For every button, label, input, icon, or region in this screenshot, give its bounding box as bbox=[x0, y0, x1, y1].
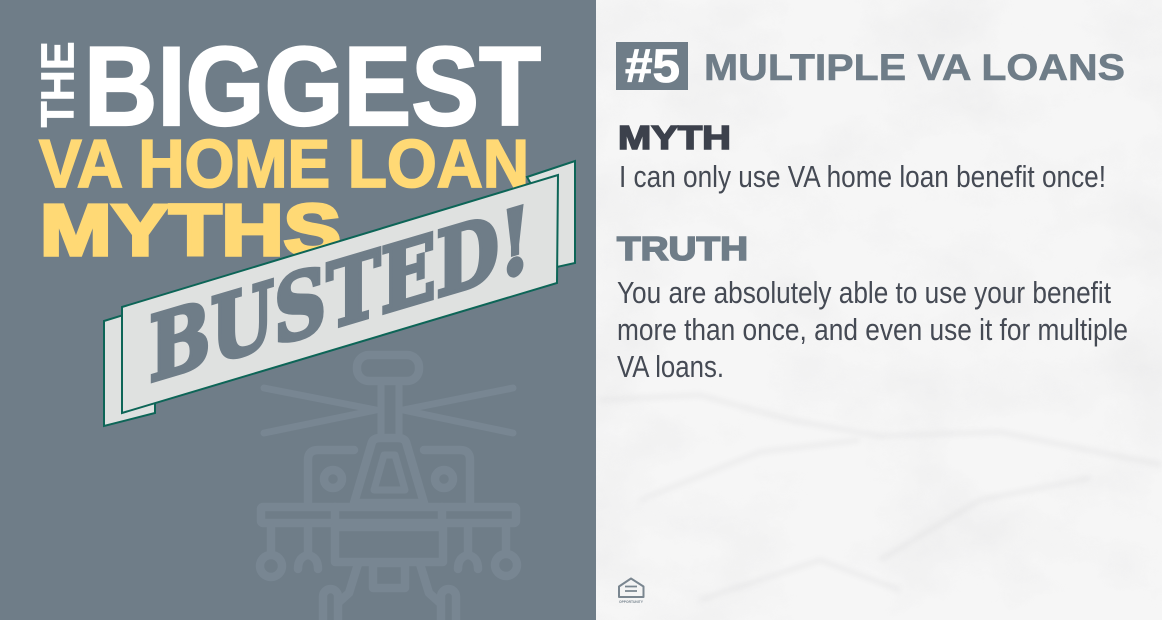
heading text: MULTIPLE VA LOANS bbox=[704, 47, 1125, 88]
panel: left slate background bbox=[0, 0, 596, 620]
truth label: TRUTH bbox=[617, 230, 748, 267]
banner front bbox=[122, 175, 558, 413]
text block: truth bbox=[617, 230, 1128, 384]
myth label: MYTH bbox=[618, 119, 731, 156]
banner back left tail bbox=[104, 313, 155, 426]
title word: THE: THE bbox=[32, 42, 84, 128]
title: The Biggest VA Home Loan Myths bbox=[32, 24, 541, 271]
banner back right tail bbox=[527, 161, 575, 267]
icon: equal housing opportunity bbox=[619, 578, 644, 604]
truth body bbox=[617, 275, 1128, 384]
heading: #5 Multiple VA Loans bbox=[616, 39, 1125, 92]
banner text: BUSTED! bbox=[149, 185, 531, 404]
icon: equal housing opportunity: OPPORTUNITY bbox=[619, 599, 643, 604]
panel: right marble background bbox=[596, 0, 1162, 620]
number badge bbox=[616, 42, 688, 90]
banner: BUSTED ribbon bbox=[104, 161, 575, 426]
text block: myth bbox=[618, 119, 1106, 194]
title word: MYTHS: MYTHS bbox=[40, 191, 341, 271]
number text: #5 bbox=[625, 39, 680, 92]
title line: VA HOME LOAN: VA HOME LOAN bbox=[39, 126, 529, 202]
icon: helicopter watermark bbox=[260, 355, 517, 620]
title word: BIGGEST: BIGGEST bbox=[84, 24, 541, 149]
truth body: VA loans. bbox=[617, 349, 724, 384]
